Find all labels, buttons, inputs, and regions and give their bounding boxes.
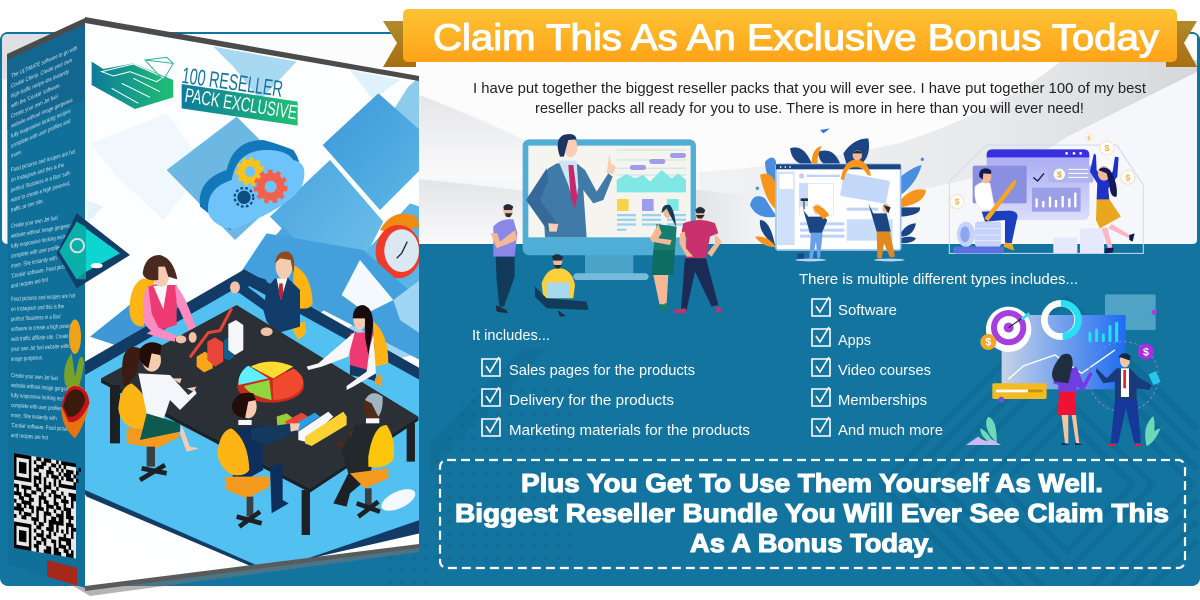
coins <box>950 134 1135 209</box>
woman presenter <box>1052 354 1093 445</box>
spine copy: perfect 'Business in a Box' soft- <box>11 170 71 194</box>
coins: $ <box>1126 172 1131 182</box>
spine copy: website without image gorgeous <box>11 382 73 394</box>
alarm clock <box>376 214 419 278</box>
woman in teal <box>650 205 677 310</box>
checklist: product types: Video courses <box>838 362 931 379</box>
intro paragraph: I have put together the biggest reseller packs that you will ever see. I have put together 100 of my best <box>473 80 1147 97</box>
man with pencil <box>975 168 1017 251</box>
leaves <box>750 128 926 247</box>
block props <box>277 412 347 446</box>
spine copy: perfect 'Business in a Box' <box>11 314 61 323</box>
phone prop <box>57 213 130 288</box>
floor <box>85 269 419 566</box>
pie chart <box>237 362 304 403</box>
intro paragraph: reseller packs all ready for you to use. There is more in here than you will ever need! <box>535 100 1084 117</box>
spine copy: fully responsive looking recipes <box>11 392 71 403</box>
man in magenta shirt <box>674 207 722 313</box>
coin stack <box>953 222 1104 253</box>
checklist: package contents <box>482 357 750 439</box>
ribbon fold left <box>383 21 416 67</box>
dashboard board <box>1002 315 1126 389</box>
spine copy: more. <box>11 149 22 160</box>
purple dashboard: $ <box>1057 169 1062 179</box>
heading: multiple types: There is multiple different types includes... <box>799 271 1078 288</box>
box top edge <box>85 17 419 81</box>
box spine <box>7 20 85 588</box>
checklist: product types: Software <box>838 302 897 319</box>
coins: $ <box>985 337 991 349</box>
spine top edge <box>7 18 85 60</box>
illustration: presenter on monitor with team <box>491 134 722 317</box>
donut <box>1044 303 1078 337</box>
checklist: package contents: Marketing materials for the products <box>509 422 750 439</box>
hands and sleeves on table <box>147 327 273 343</box>
logo: PACK EXCLUSIVE <box>183 85 299 124</box>
title banner <box>403 9 1177 62</box>
spine copy: complete with user profiles and <box>11 118 70 150</box>
spine copy: Food pictures and recipes are hot <box>11 149 76 174</box>
intro paragraph <box>473 80 1147 117</box>
logo <box>92 57 299 126</box>
spine copy <box>10 45 77 444</box>
illustration: web page builders <box>750 128 1143 261</box>
ribbon fold right <box>1166 21 1197 67</box>
spine copy: 'Cookie' software. Food pictures <box>11 262 72 280</box>
spine copy: Cookie Chimp. Create your own <box>11 57 72 90</box>
grey haired man <box>333 393 394 517</box>
spine copy: with the 'Cookie' software. <box>10 82 61 111</box>
coins: $ <box>1143 346 1149 358</box>
man in purple shirt <box>491 204 517 313</box>
cover diamonds <box>87 47 420 367</box>
spine copy: high-traffic recipe site instantly <box>11 69 69 100</box>
woman at right of table <box>307 305 388 390</box>
illustration: analytics team <box>966 294 1161 446</box>
spine copy: on Instagram and this is the <box>11 303 64 313</box>
woman in pink <box>129 255 197 342</box>
checklist: package contents: Delivery for the products <box>509 392 674 409</box>
coins <box>980 334 1154 360</box>
purple dashboard outline <box>949 145 1143 253</box>
box bottom edge <box>85 544 419 591</box>
yellow card <box>992 383 1047 403</box>
spine copy: more. She instantly with <box>11 412 57 422</box>
coins: $ <box>955 197 960 207</box>
callout: dashed box: Plus You Get To Use Them Yourself As Well. <box>521 468 1103 498</box>
spine copy: and recipes are hot <box>11 432 48 442</box>
coins: $ <box>1087 136 1091 142</box>
callout: dashed box <box>440 460 1185 568</box>
presenter <box>526 134 616 237</box>
title banner: Claim This As An Exclusive Bonus Today <box>433 17 1160 58</box>
spine copy: image gorgeous. <box>11 355 43 363</box>
spine copy: fully responsive looking recipes <box>11 108 71 140</box>
man presenter <box>1096 353 1161 446</box>
cloud with gears <box>200 140 304 230</box>
checklist: product types: And much more <box>838 422 943 439</box>
bar chart props <box>190 308 243 372</box>
spine copy: ware to create a high powered, <box>11 180 70 204</box>
table <box>101 305 418 535</box>
spine copy: more. She instantly with <box>11 255 57 270</box>
checklist: product types: Apps <box>838 332 871 349</box>
checklist: product types: Memberships <box>838 392 927 409</box>
spine copy: your own Jet fuel website without <box>11 343 75 353</box>
target <box>986 307 1031 352</box>
spine copy: Food pictures and recipes are hot <box>11 293 76 303</box>
spine copy: fully responsive looking recipes <box>11 233 71 250</box>
builder figures <box>795 150 905 261</box>
spine copy: software to create a high powered <box>11 323 76 333</box>
spine copy: complete with user profiles and <box>11 402 70 413</box>
spine copy: web traffic affiliate site. Create <box>11 333 69 343</box>
plants <box>966 416 1161 446</box>
diamonds behind floor <box>90 233 420 360</box>
spine copy: The ULTIMATE software to go with <box>11 45 77 80</box>
browser window <box>776 164 901 250</box>
spine copy: complete with user profiles and <box>11 243 71 260</box>
spine copy: 'Cookie' software. Food pictures <box>11 422 72 434</box>
checklist: package contents: Sales pages for the products <box>509 362 695 379</box>
potted plant prop <box>62 319 89 438</box>
callout: dashed box: As A Bonus Today. <box>690 528 934 558</box>
checklist: product types <box>812 297 943 439</box>
coins: $ <box>1105 143 1110 153</box>
spine copy: traffic at one site. <box>11 198 44 214</box>
purple dashboard <box>973 149 1093 220</box>
man in front <box>217 393 300 527</box>
man in suit <box>230 251 313 340</box>
QR code <box>14 453 81 559</box>
spine copy: website without image gorgeous <box>10 97 73 131</box>
heading: it includes: It includes... <box>472 327 550 344</box>
woman with ponytail <box>118 342 199 480</box>
spine copy: Create your own Jet fuel <box>11 372 58 383</box>
monitor <box>523 139 696 280</box>
callout: dashed box: Biggest Reseller Bundle You Will Ever See Claim This <box>455 498 1169 528</box>
spine copy: Create your own Jet fuel <box>11 93 58 120</box>
spine copy: website without image gorgeous <box>11 222 73 240</box>
spine copy: Create your own Jet fuel <box>11 215 58 230</box>
box ground shadow <box>60 545 419 596</box>
spine copy: on Instagram and this is the <box>11 162 64 184</box>
man sitting with laptop <box>535 254 588 317</box>
woman with raised arms <box>1090 153 1135 253</box>
box front cover <box>85 32 419 586</box>
product box <box>7 17 421 596</box>
logo: 100 RESELLER <box>180 62 285 102</box>
spine copy: and recipes are hot <box>11 277 48 290</box>
